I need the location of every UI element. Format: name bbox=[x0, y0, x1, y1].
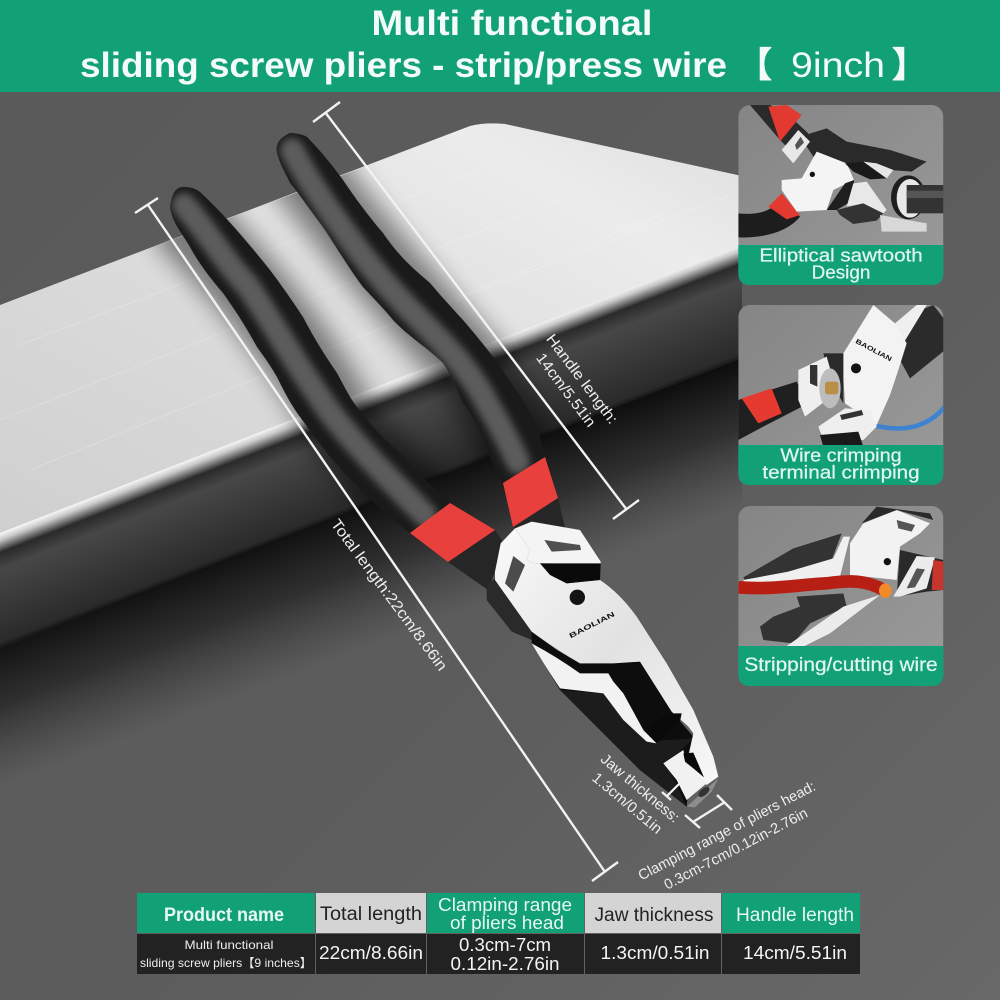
dimension line: handle length bbox=[313, 102, 639, 519]
dimension line: total length bbox=[135, 198, 618, 881]
lower jaw bbox=[847, 182, 887, 215]
dimension: clamping range bbox=[685, 795, 732, 828]
red collars bbox=[410, 457, 558, 562]
upper jaw bbox=[743, 533, 842, 583]
value row bbox=[137, 934, 860, 974]
label: jaw thickness: 1.3cm/0.51in bbox=[589, 769, 665, 838]
caption bbox=[738, 646, 943, 686]
head plate bbox=[782, 152, 854, 212]
header row: Clamping range bbox=[438, 895, 572, 915]
left handle bbox=[170, 187, 450, 533]
label: clamping range: Clamping range of pliers head: bbox=[636, 779, 818, 884]
header row: Handle length bbox=[736, 905, 854, 926]
right handle bbox=[900, 305, 945, 378]
header row: Total length bbox=[320, 904, 422, 925]
top title banner: 】 bbox=[892, 46, 927, 85]
collar connectors bbox=[448, 498, 565, 590]
lower jaw bbox=[760, 593, 847, 643]
caption bbox=[738, 245, 943, 285]
clamped pipe bbox=[891, 175, 926, 219]
metal bar bbox=[0, 123, 742, 810]
header row bbox=[137, 893, 860, 933]
value row: 0.3cm-7cm bbox=[459, 935, 551, 955]
head plate bbox=[843, 305, 907, 425]
label: handle length: Handle length: bbox=[542, 331, 621, 428]
pliers head bbox=[487, 522, 718, 807]
specification table bbox=[137, 893, 860, 974]
panel: elliptical sawtooth design bbox=[738, 105, 945, 285]
red wire bbox=[738, 581, 885, 591]
value row: 14cm/5.51in bbox=[743, 943, 847, 963]
caption: terminal crimping bbox=[762, 461, 920, 482]
top title banner: Multi functional bbox=[372, 4, 652, 43]
value row: 1.3cm/0.51in bbox=[600, 943, 710, 963]
value row: sliding screw pliers【9 inches】 bbox=[140, 956, 312, 970]
value row: 0.12in-2.76in bbox=[450, 954, 560, 974]
head plate bbox=[850, 510, 930, 580]
top title banner: 【 bbox=[737, 46, 772, 85]
right handle bbox=[897, 550, 943, 597]
caption: Design bbox=[812, 261, 870, 282]
caption: Wire crimping bbox=[780, 445, 902, 466]
top title banner: sliding screw pliers - strip/press wire bbox=[80, 46, 727, 85]
label: clamping range: 0.3cm-7cm/0.12in-2.76in bbox=[662, 806, 811, 893]
lower handle bbox=[738, 208, 800, 238]
left handle bbox=[738, 382, 801, 440]
header row: Product name bbox=[164, 905, 284, 926]
pliers head: BAOLIAN bbox=[568, 611, 616, 640]
top title banner: 9inch bbox=[791, 46, 885, 85]
panel: wire crimping bbox=[738, 305, 945, 485]
header row: of pliers head bbox=[450, 913, 564, 933]
caption bbox=[738, 445, 943, 485]
caption: Stripping/cutting wire bbox=[744, 655, 938, 676]
value row: Multi functional bbox=[184, 938, 274, 952]
upper jaw dark bbox=[800, 128, 927, 172]
upper handle bbox=[750, 105, 808, 146]
dimension: jaw thickness tick bbox=[662, 783, 680, 800]
label: total length: Total length:22cm/8.66in bbox=[327, 516, 450, 674]
lower jaw bbox=[818, 408, 877, 440]
value row: 22cm/8.66in bbox=[319, 943, 423, 963]
label: handle length: 14cm/5.51in bbox=[532, 350, 599, 431]
caption: Elliptical sawtooth bbox=[759, 245, 923, 266]
panel: wire crimping: BAOLIAN bbox=[854, 338, 893, 363]
blue wire bbox=[877, 407, 945, 428]
panel: stripping and cutting wire bbox=[738, 506, 943, 686]
label: jaw thickness: Jaw thickness: bbox=[597, 751, 683, 826]
header row: Jaw thickness bbox=[594, 905, 714, 926]
crimped terminal bbox=[798, 357, 833, 417]
top title banner bbox=[0, 0, 1000, 92]
pliers bbox=[170, 133, 718, 807]
right handle bbox=[277, 133, 545, 483]
